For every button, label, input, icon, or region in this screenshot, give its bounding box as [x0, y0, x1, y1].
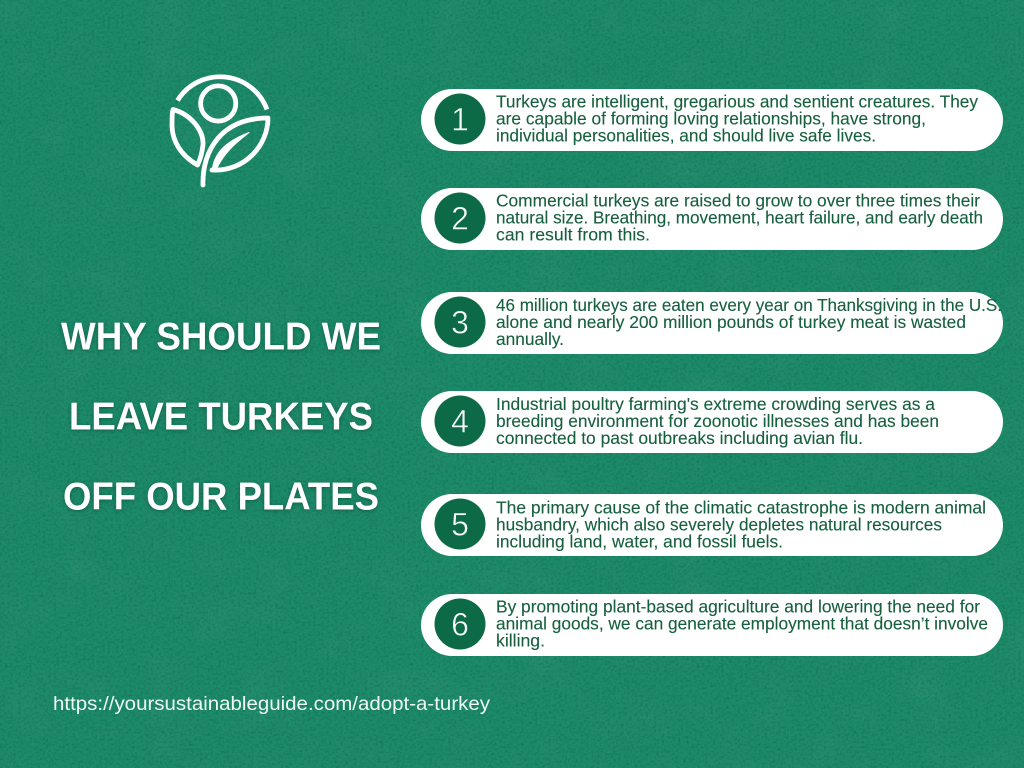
item 3: [421, 292, 1003, 354]
item 5: including land, water, and fossil fuels.: [496, 532, 783, 552]
item 2: 2: [451, 200, 469, 236]
item 1: individual personalities, and should live safe lives.: [496, 126, 876, 146]
title: WHY SHOULD WE: [61, 316, 381, 358]
item 1: 1: [451, 102, 469, 138]
item 6: 6: [451, 606, 469, 642]
item 1: are capable of forming loving relationships, have strong,: [496, 108, 926, 128]
item 5: husbandry, which also severely depletes natural resources: [496, 514, 942, 534]
item 3: 46 million turkeys are eaten every year on Thanksgiving in the U.S.: [496, 295, 1002, 315]
icon: person with leaves logo: [172, 77, 268, 185]
item 3: 3: [451, 304, 469, 340]
item 5: [421, 494, 1003, 556]
item 4: connected to past outbreaks including avian flu.: [496, 428, 863, 448]
item 6: By promoting plant-based agriculture and lowering the need for: [496, 596, 980, 616]
title: OFF OUR PLATES: [63, 476, 379, 518]
item 2: [421, 188, 1003, 250]
item 2: Commercial turkeys are raised to grow to over three times their: [496, 190, 980, 210]
item 4: [421, 391, 1003, 453]
item 1: Turkeys are intelligent, gregarious and sentient creatures. They: [496, 92, 978, 112]
item 4: 4: [451, 404, 469, 440]
item 2: natural size. Breathing, movement, heart failure, and early death: [496, 208, 983, 228]
item 3: alone and nearly 200 million pounds of turkey meat is wasted: [496, 312, 966, 332]
item 3: annually.: [496, 329, 564, 349]
title: [61, 316, 381, 518]
item 4: breeding environment for zoonotic illnesses and has been: [496, 411, 939, 431]
item 2: can result from this.: [496, 224, 650, 244]
item 6: killing.: [496, 630, 545, 650]
item 6: [421, 594, 1003, 656]
item 4: Industrial poultry farming's extreme crowding serves as a: [496, 394, 935, 414]
item 5: The primary cause of the climatic catastrophe is modern animal: [496, 498, 986, 518]
item 6: animal goods, we can generate employment that doesn’t involve: [496, 614, 988, 634]
source url: https://yoursustainableguide.com/adopt-a-turkey: [53, 693, 490, 715]
item 1: [421, 89, 1003, 151]
title: LEAVE TURKEYS: [69, 396, 373, 438]
item 5: 5: [451, 506, 469, 542]
